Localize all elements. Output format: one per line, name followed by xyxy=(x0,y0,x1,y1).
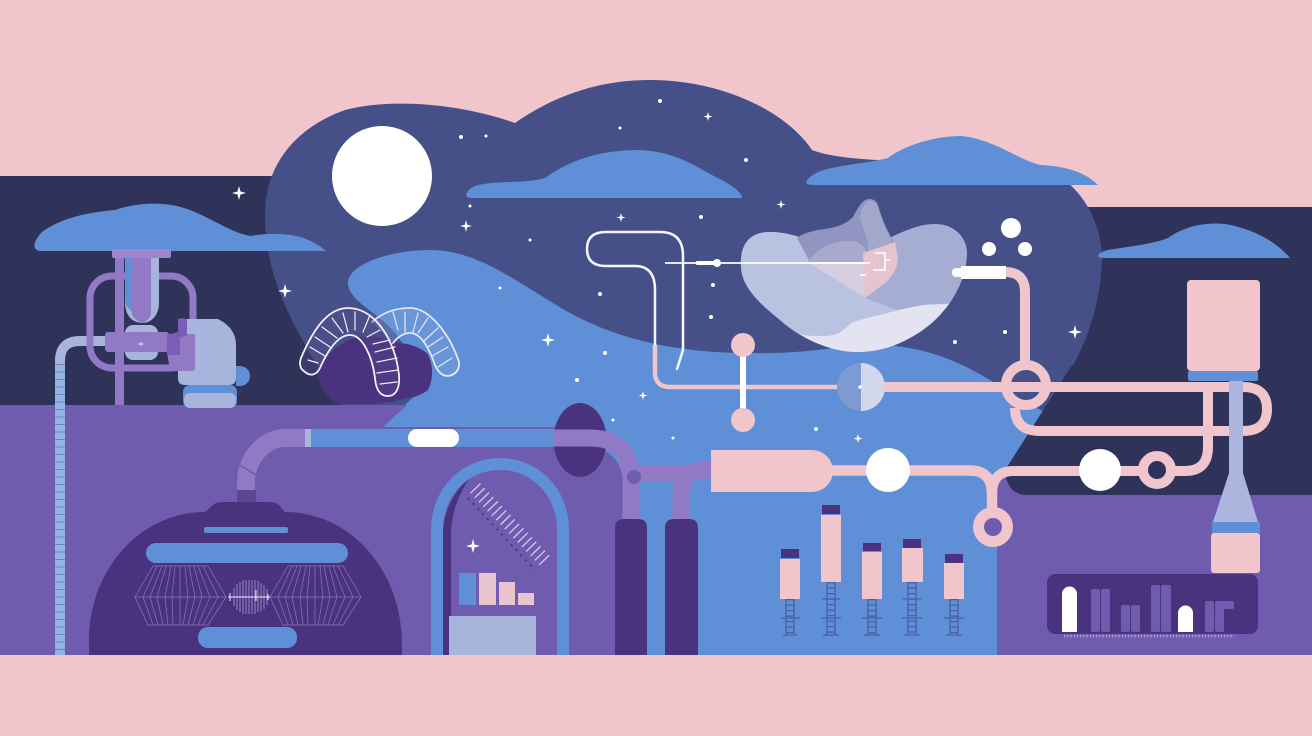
elbow to cylinder xyxy=(681,470,712,520)
rod xyxy=(740,355,746,410)
panel: right navy band xyxy=(1000,207,1312,495)
white plug tip xyxy=(952,266,1006,279)
pipe: pink line to lower ring xyxy=(830,470,992,516)
pink cylinder xyxy=(711,450,833,492)
dome body xyxy=(89,502,402,655)
needle body xyxy=(696,261,716,265)
dark crescent xyxy=(443,479,469,655)
tube core xyxy=(132,258,151,323)
thin slot xyxy=(204,527,288,533)
bracket xyxy=(860,253,890,275)
plug end xyxy=(952,268,966,277)
needle line xyxy=(665,262,870,264)
pipe: thin pink line xyxy=(655,345,840,387)
clipped layers xyxy=(740,232,950,352)
dark ellipse behind pipe xyxy=(554,403,606,477)
circle: white node right xyxy=(1079,449,1121,491)
pipe: branch to ring and white circle xyxy=(992,387,1208,495)
right half xyxy=(861,363,885,411)
horizontal branch xyxy=(639,465,689,482)
pipe: purple right arc xyxy=(553,438,631,520)
ring: lower xyxy=(978,512,1008,542)
panel xyxy=(1047,574,1258,634)
ring: small navy hole xyxy=(1143,456,1171,484)
right tower device xyxy=(1187,280,1260,573)
stars and dots xyxy=(232,99,1082,443)
organ: translucent central shape xyxy=(665,199,967,360)
periwinkle band xyxy=(305,429,311,447)
elbow xyxy=(246,438,306,490)
dark clip xyxy=(167,318,187,355)
illustration: night landscape with pipes and devices xyxy=(0,80,1312,655)
syringe 1 xyxy=(780,549,800,635)
blue nub xyxy=(236,366,250,386)
needle dot xyxy=(713,259,721,267)
cloud: far right xyxy=(1098,224,1290,258)
base shape xyxy=(741,224,967,352)
pipe: purple elbow from dome xyxy=(237,429,554,503)
purple connector xyxy=(167,334,195,371)
panel: navy overlay with diagonal edge xyxy=(1005,365,1312,495)
signal peaks xyxy=(228,590,270,601)
plug body xyxy=(961,266,1006,279)
device: left purple clamp xyxy=(60,249,250,655)
panel: left purple ground xyxy=(0,405,623,655)
purple bars xyxy=(1091,585,1234,632)
top bar xyxy=(112,249,171,258)
star xyxy=(466,539,480,553)
large pill xyxy=(146,543,348,563)
base block xyxy=(449,616,536,655)
left aligner xyxy=(300,308,399,396)
hose lower xyxy=(55,364,65,655)
lens upper xyxy=(808,241,868,262)
right mesh xyxy=(270,566,361,625)
left mesh xyxy=(135,566,226,625)
hatch dots xyxy=(468,498,535,570)
dome device xyxy=(89,502,402,655)
syringe 2 xyxy=(821,505,841,635)
panel: blue hill xyxy=(348,250,1050,655)
pin xyxy=(138,342,144,346)
arch chamber xyxy=(437,464,563,655)
panel: night sky heart shape xyxy=(265,80,1102,480)
seam xyxy=(240,465,256,475)
left half xyxy=(837,363,861,411)
purple bar xyxy=(105,332,169,352)
ring: junction xyxy=(1006,365,1046,405)
block xyxy=(178,319,236,385)
syringe 3 xyxy=(862,543,882,635)
pillar: left xyxy=(615,519,647,655)
white bar short xyxy=(1178,606,1193,632)
upper petal xyxy=(797,199,898,298)
syringe 4 xyxy=(902,539,923,635)
center dot xyxy=(858,385,862,389)
bar chart panel xyxy=(1047,574,1258,636)
white bars xyxy=(1062,587,1077,632)
blue collar xyxy=(1188,371,1258,381)
pipe: purple branch xyxy=(627,465,712,520)
lollipop connector xyxy=(731,333,755,432)
collar xyxy=(237,490,256,503)
valve: half circle xyxy=(837,363,885,411)
pipe: thick pink right loop xyxy=(880,387,1267,431)
hose xyxy=(60,341,105,364)
light left lobe xyxy=(740,232,897,352)
capsule xyxy=(125,325,158,360)
icon: dental aligners on dark blob xyxy=(300,308,459,404)
tick row xyxy=(1064,635,1234,637)
cloud: middle xyxy=(466,150,742,198)
hatch marks xyxy=(475,488,547,563)
tube xyxy=(125,258,159,323)
stem and flare xyxy=(1213,381,1258,522)
panel: right purple ground xyxy=(997,478,1312,655)
top knob xyxy=(731,333,755,357)
panel: bottom pink strip xyxy=(0,655,1312,736)
cloud: right xyxy=(806,136,1098,185)
icon: moon xyxy=(332,126,432,226)
syringe chart xyxy=(780,505,964,635)
white lower wave xyxy=(800,304,950,352)
wire: white catheter line xyxy=(587,232,683,369)
pillar: right xyxy=(665,519,698,655)
blue band xyxy=(1212,522,1260,533)
joint dot xyxy=(627,470,641,484)
rod xyxy=(115,258,124,405)
pink base xyxy=(1211,533,1260,573)
pink tank xyxy=(1187,280,1260,371)
cloud: left xyxy=(34,204,326,251)
lower pill xyxy=(198,627,297,648)
dark blob xyxy=(316,337,432,404)
base cap xyxy=(184,393,236,408)
frame xyxy=(90,276,193,368)
lens lower xyxy=(808,262,867,298)
central signal xyxy=(234,580,267,614)
pipe: vertical from white tip to ring xyxy=(1000,272,1025,365)
circle: white node center xyxy=(866,448,910,492)
right aligner xyxy=(372,308,459,376)
white pill xyxy=(408,429,459,447)
blue arch xyxy=(437,464,563,655)
hose ribs xyxy=(55,364,65,655)
blue section xyxy=(311,429,554,447)
panel: left navy band xyxy=(0,176,400,416)
syringe 5 xyxy=(944,554,964,635)
bar chart xyxy=(459,573,534,605)
petal highlight xyxy=(860,201,895,255)
bottom knob xyxy=(731,408,755,432)
bubbles: three white circles xyxy=(982,218,1032,256)
base xyxy=(183,385,237,408)
tube blue strip xyxy=(125,258,132,312)
pink section xyxy=(863,242,898,298)
